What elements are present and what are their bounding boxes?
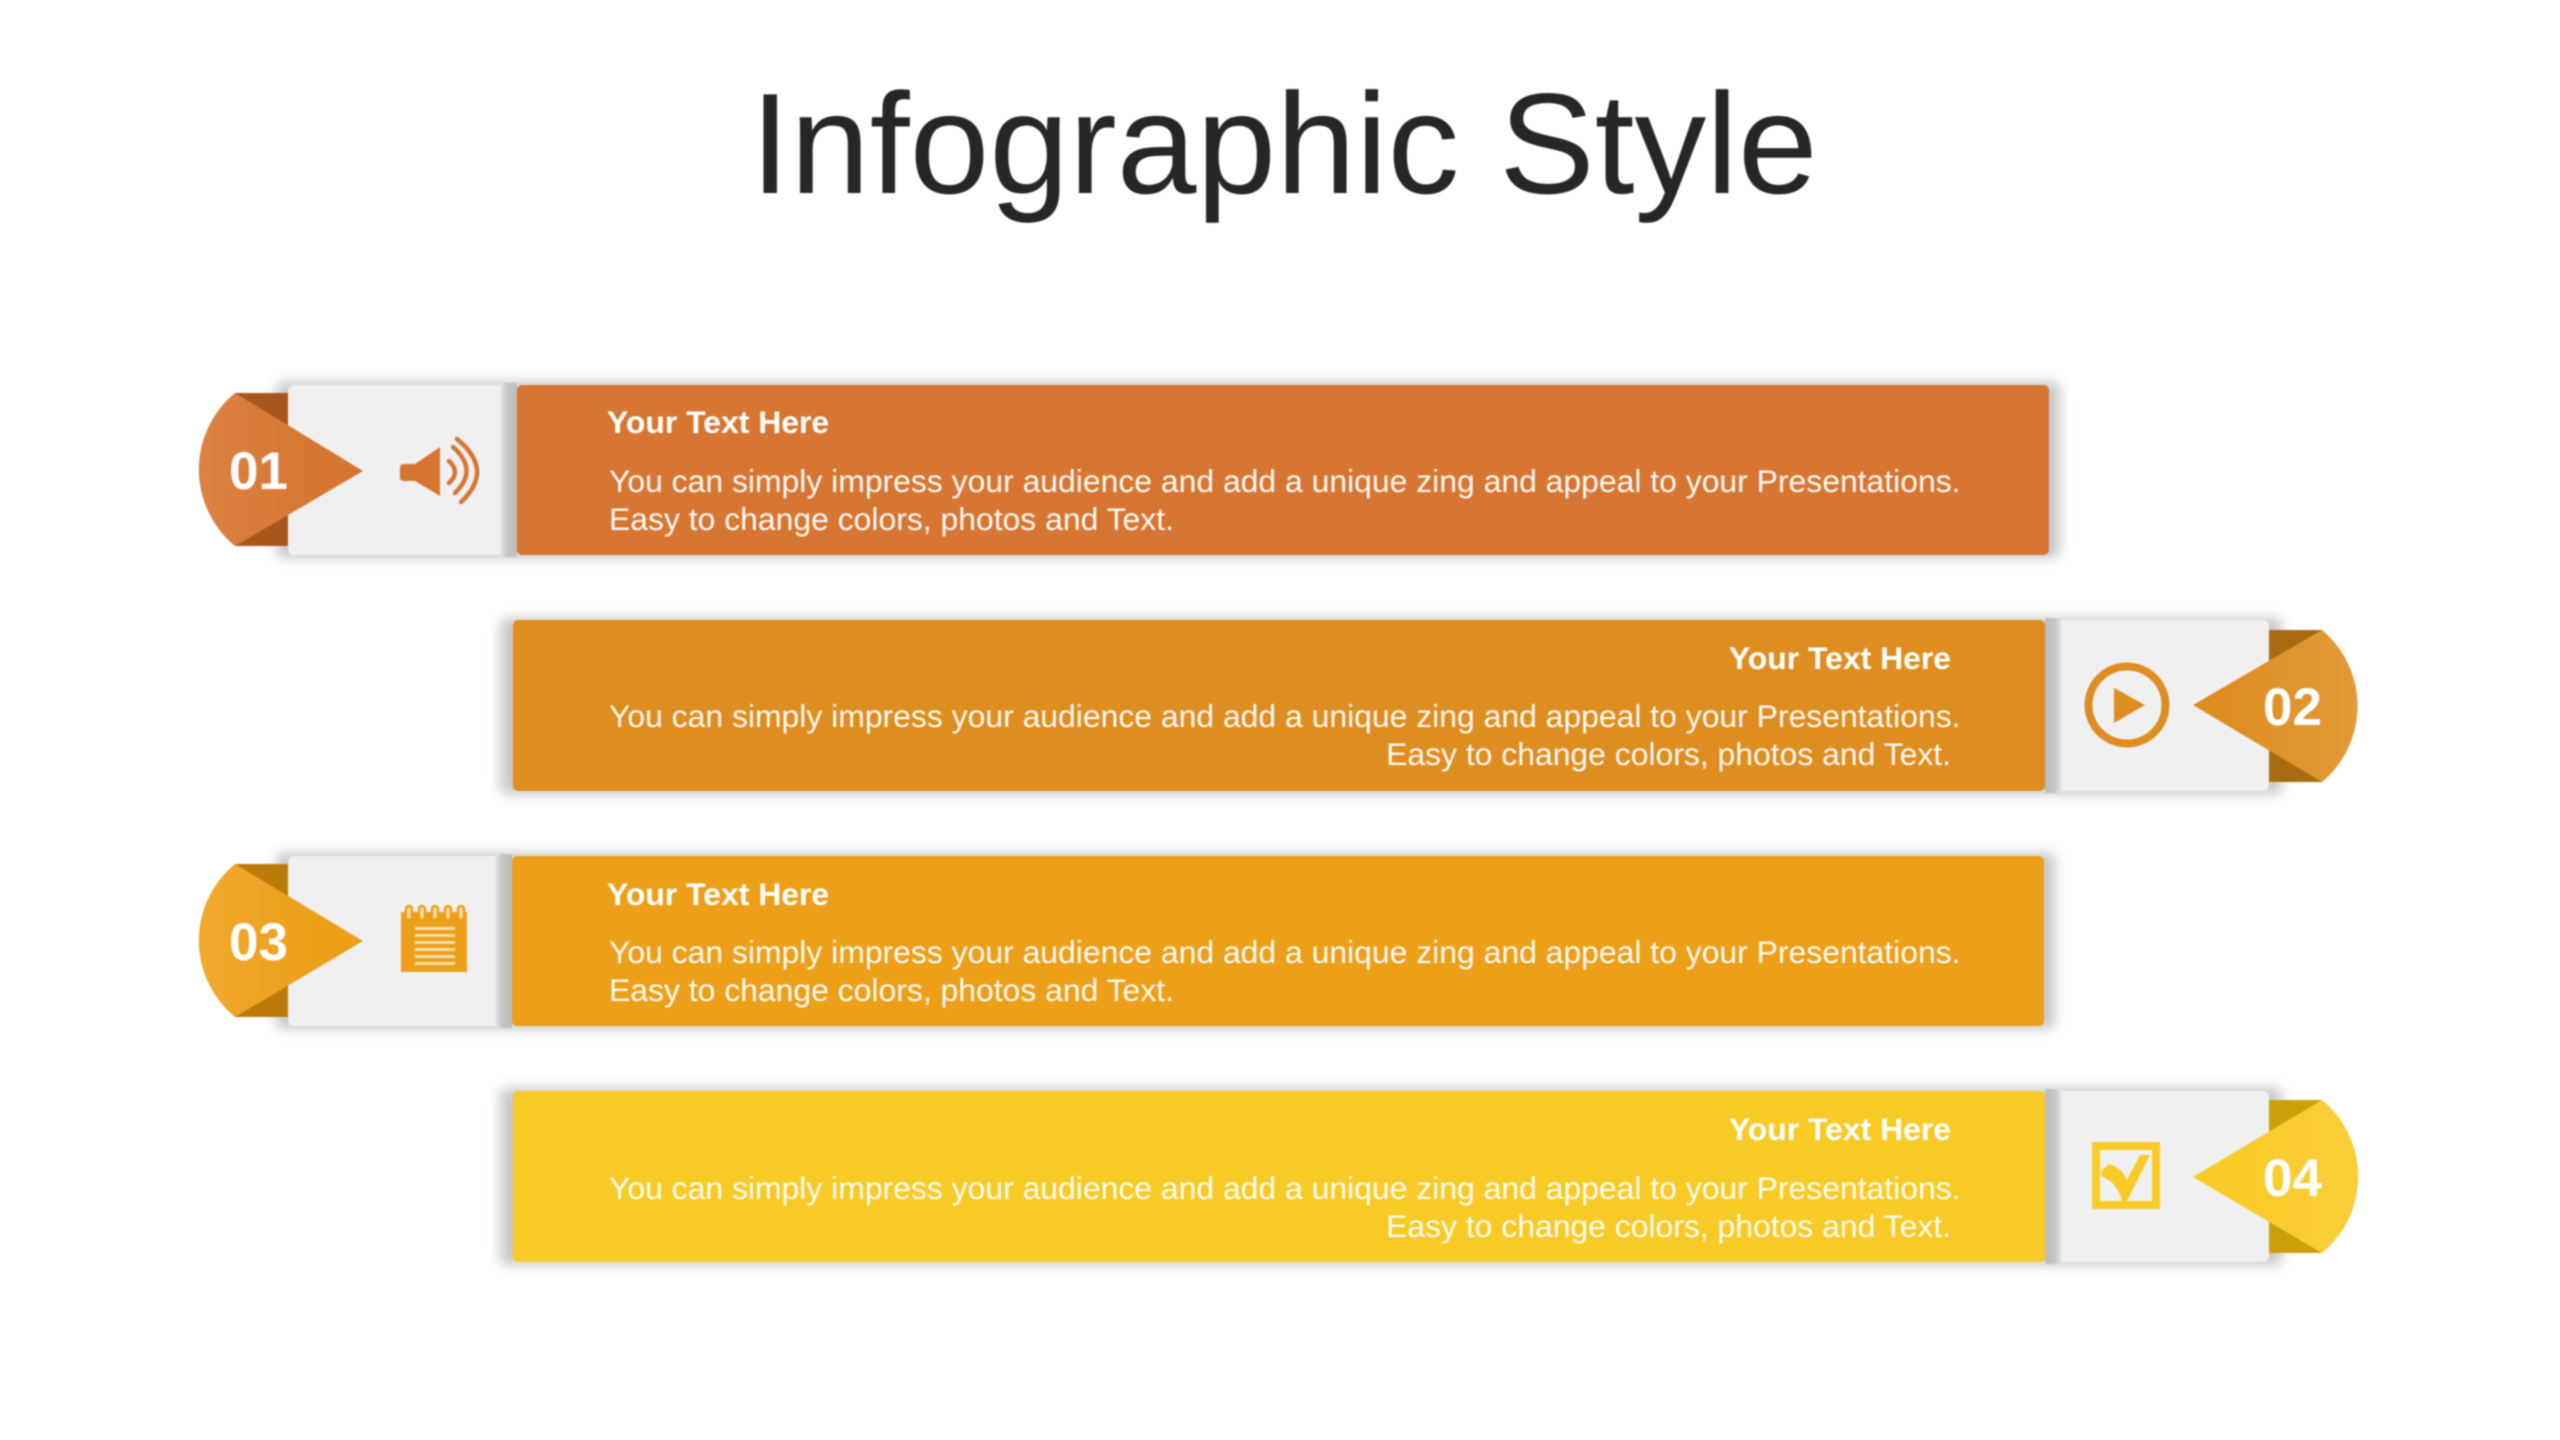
title: Infographic Style: [750, 64, 1818, 224]
row 01 body: You can simply impress your audience and add a unique zing and appeal to your Presentations.: [609, 463, 1961, 499]
row 01 shadow: [276, 382, 2060, 558]
row 04 card shade: [2045, 1089, 2062, 1264]
row 03 number: 03: [229, 913, 288, 972]
row 03 heading: Your Text Here: [607, 876, 829, 912]
row 04 number: 04: [2263, 1149, 2322, 1208]
row 02 heading: Your Text Here: [1729, 640, 1951, 676]
row 03 shadow: [276, 853, 2055, 1029]
row 03 body: [609, 934, 1961, 1008]
row 04 icon card: [2050, 1091, 2269, 1262]
row 02 pointer: [2193, 630, 2358, 782]
row 03 colour panel: [512, 856, 2044, 1026]
icon: notepad: [401, 906, 467, 972]
row 04 body: [609, 1170, 1961, 1244]
row 02 card shade: [2045, 618, 2062, 793]
icon: speaker: [400, 439, 477, 502]
row 02 fold: [2268, 630, 2322, 782]
row 04 body: You can simply impress your audience and add a unique zing and appeal to your Presentations.: [609, 1170, 1961, 1206]
row 01 fold: [235, 393, 289, 546]
row 04 colour panel: [513, 1091, 2045, 1262]
row 01: [199, 382, 2060, 558]
row 04 shadow: [500, 1088, 2282, 1265]
row 01 body: [609, 463, 1961, 537]
row 02: [500, 618, 2358, 794]
row 02 shadow: [500, 618, 2282, 794]
row 04 body: Easy to change colors, photos and Text.: [1386, 1208, 1951, 1244]
row 03 card shade: [495, 854, 512, 1028]
row 01 number: 01: [229, 442, 288, 501]
row 01 card shade: [500, 383, 517, 557]
row 04 heading: Your Text Here: [1729, 1111, 1951, 1147]
row 03 icon card: [288, 856, 513, 1026]
row 02 body: You can simply impress your audience and add a unique zing and appeal to your Presentations.: [609, 698, 1961, 734]
row 01 heading: Your Text Here: [607, 404, 829, 440]
row 02 body: [609, 698, 1961, 772]
row 01 pointer: [199, 393, 363, 546]
row 02 number: 02: [2263, 678, 2322, 737]
row 02 icon card: [2050, 620, 2269, 791]
row 04: [500, 1088, 2358, 1265]
row 03: [199, 853, 2055, 1029]
row 01 body: Easy to change colors, photos and Text.: [609, 501, 1174, 537]
row 03 pointer: [199, 864, 363, 1017]
icon: play: [2088, 666, 2166, 744]
row 03 body: Easy to change colors, photos and Text.: [609, 972, 1174, 1008]
row 01 colour panel: [517, 385, 2049, 555]
row 03 fold: [235, 864, 289, 1017]
row 01 icon card: [288, 385, 513, 555]
icon: checkbox: [2096, 1146, 2156, 1205]
row 04 pointer: [2193, 1100, 2358, 1253]
row 04 fold: [2268, 1100, 2322, 1253]
row 02 colour panel: [513, 620, 2045, 791]
row 03 body: You can simply impress your audience and add a unique zing and appeal to your Presentations.: [609, 934, 1961, 970]
row 02 body: Easy to change colors, photos and Text.: [1386, 736, 1951, 772]
